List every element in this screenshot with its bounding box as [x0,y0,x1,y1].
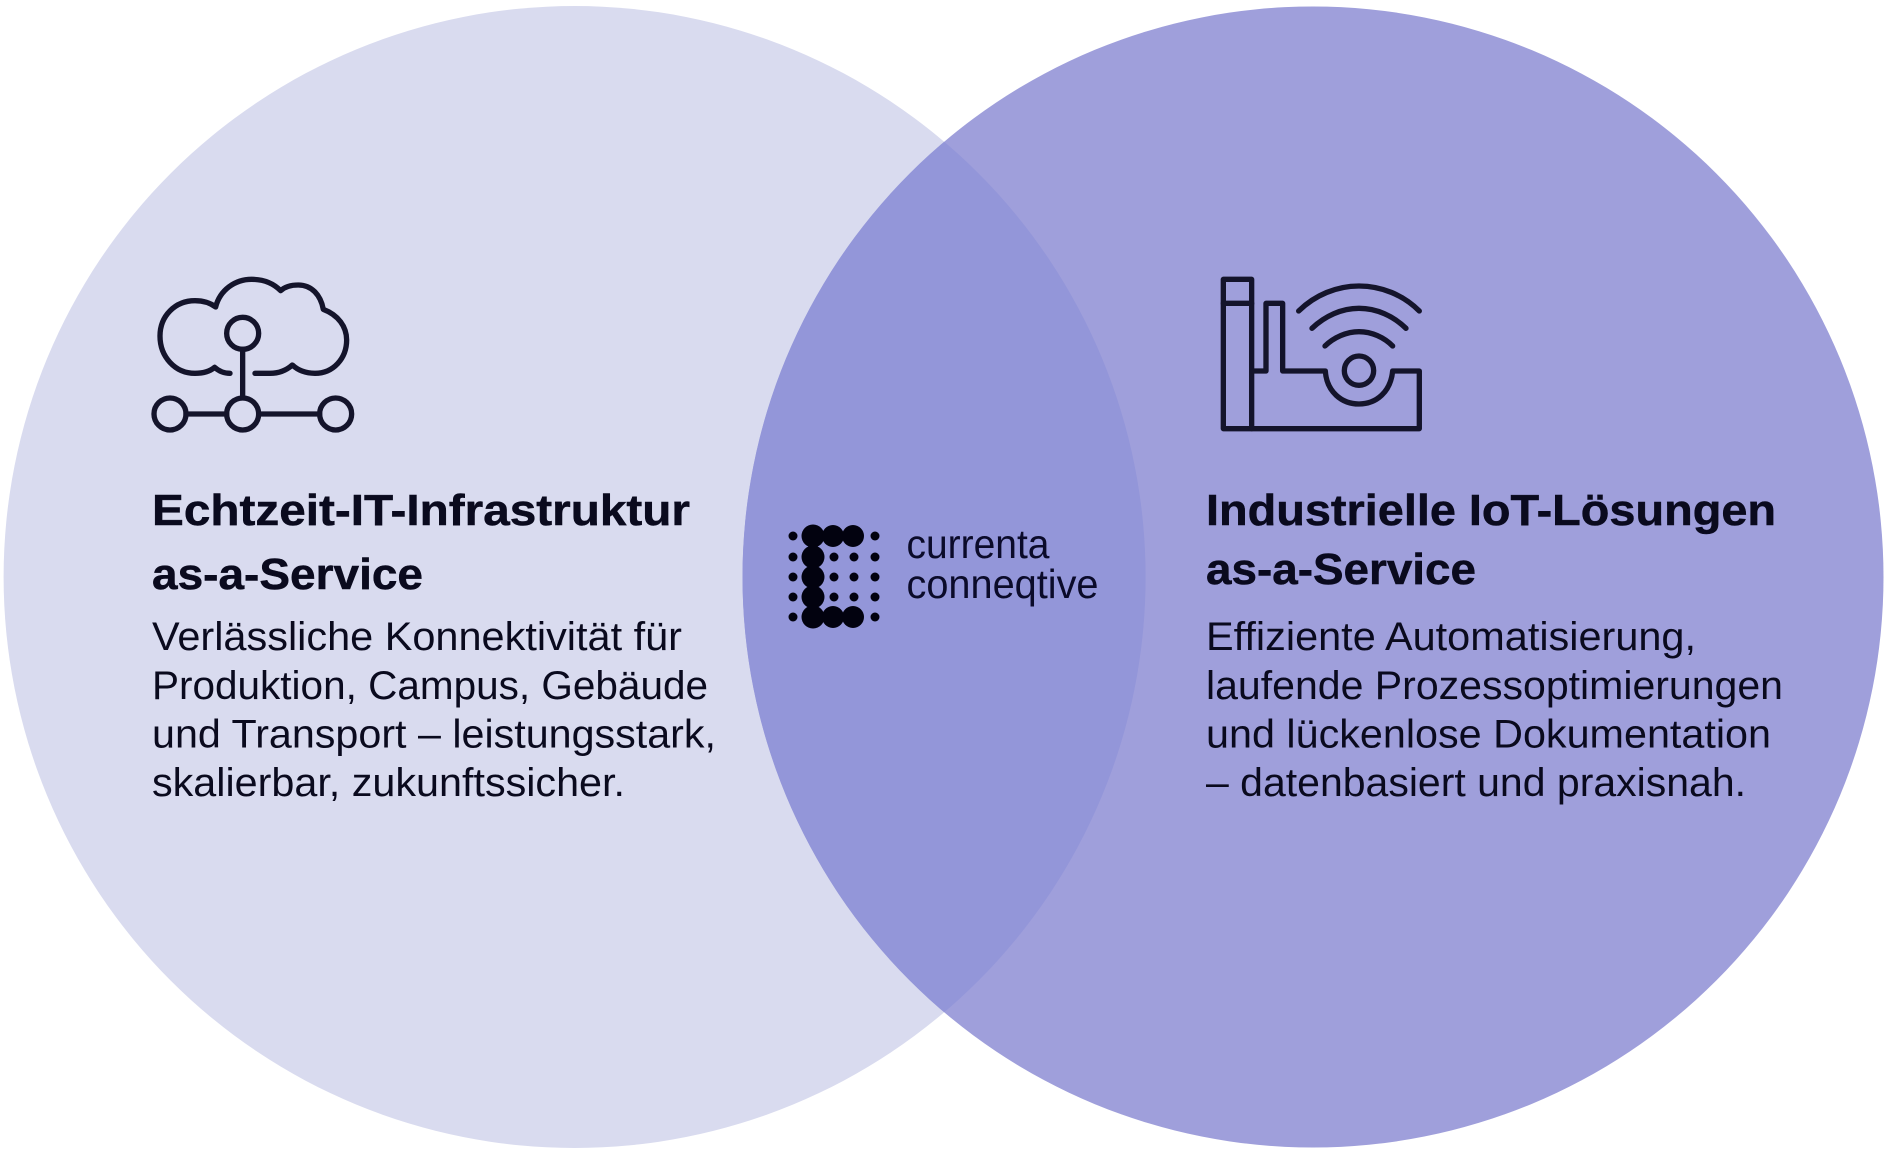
panel: overlap [742,142,1146,1012]
heading: right [1206,486,1776,594]
text block: right: Effiziente Automatisierung, [1206,615,1696,659]
text block: left: Verlässliche Konnektivität für [152,615,682,659]
logo mark [788,524,880,628]
logo wordmark [906,521,1098,607]
icon: cloud network [154,279,352,430]
icon: factory with wifi [1223,279,1419,429]
heading: right: Industrielle IoT-Lösungen [1206,486,1776,535]
heading: left: as-a-Service [152,550,423,599]
text block: left: skalierbar, zukunftssicher. [152,761,625,805]
text block: right: laufende Prozessoptimierungen [1206,664,1783,708]
text block: right [1206,615,1783,805]
heading: left [152,486,690,599]
text block: right: und lückenlose Dokumentation [1206,712,1771,756]
heading: right: as-a-Service [1206,545,1476,594]
text block: left: und Transport – leistungsstark, [152,712,716,756]
heading: left: Echtzeit-IT-Infrastruktur [152,486,690,535]
text block: left: Produktion, Campus, Gebäude [152,664,708,708]
text block: left [152,615,716,805]
panel: right circle [742,6,1884,1148]
text block: right: – datenbasiert und praxisnah. [1206,761,1746,805]
panel: left circle [4,6,1146,1148]
logo wordmark: conneqtive [906,561,1098,607]
logo wordmark: currenta [906,521,1050,567]
